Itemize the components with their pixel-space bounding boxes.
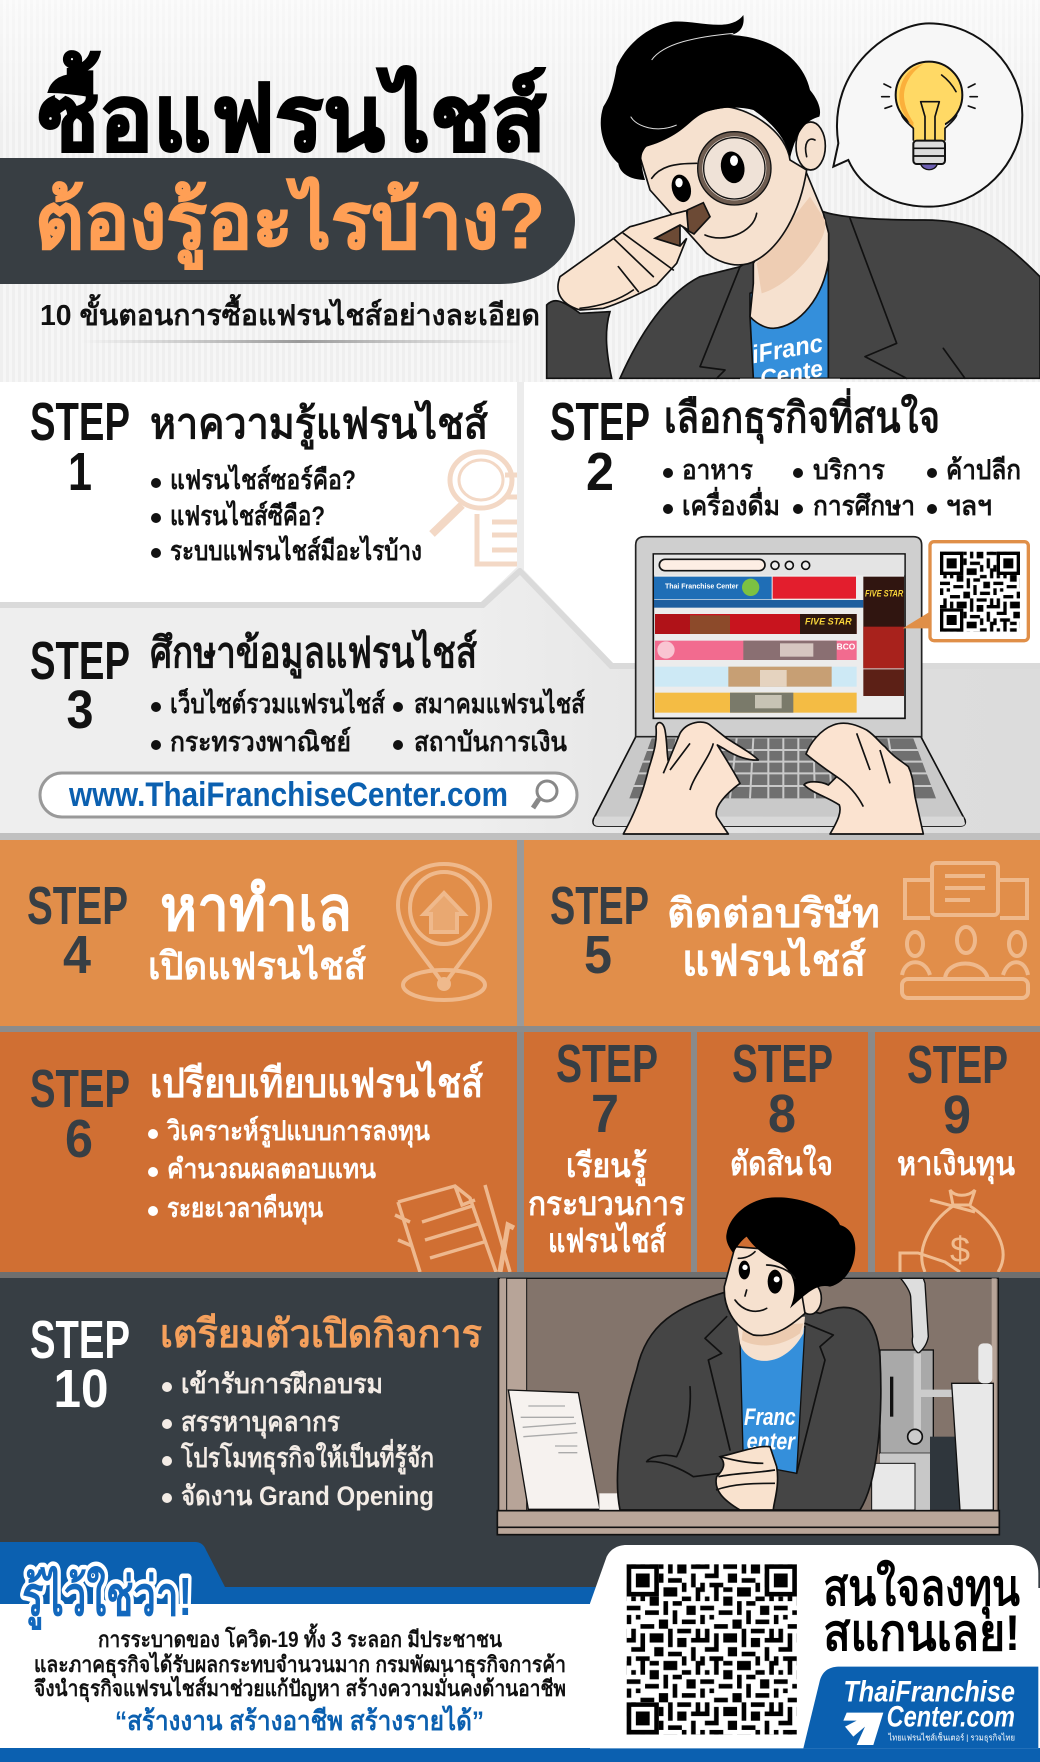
panel: step 3: [30, 628, 585, 817]
illustration: man at shop counter: enter: [747, 1428, 796, 1455]
title line 1: ซื้อแฟรนไชส์: [38, 51, 547, 170]
call to action text: สแกนเลย!: [823, 1605, 1020, 1661]
panel: step 5: [524, 840, 1040, 1026]
laptop screen: FIVE STAR: [805, 617, 852, 627]
illustration: man with magnifying glass: iFranc: [750, 329, 825, 369]
icon: location pin: [398, 864, 490, 1000]
step label: STEP: [556, 1034, 658, 1094]
title pill: ต้องรู้อะไรบ้าง?: [35, 176, 545, 270]
hand: [558, 211, 688, 310]
illustration: man at shop counter: [497, 1197, 999, 1535]
heading: เลือกธุรกิจที่สนใจ: [664, 388, 940, 444]
paragraph: การระบาดของ โควิด-19 ทั้ง 3 ระลอก มีประชาชน: [98, 1623, 502, 1652]
bullets: [663, 455, 1021, 521]
bullets: สรรหาบุคลากร: [181, 1407, 340, 1439]
step number: 10: [54, 1359, 108, 1419]
logo block: [803, 1667, 1038, 1748]
label text: [528, 1147, 685, 1259]
bullets: ระบบแฟรนไชส์มีอะไรบ้าง: [170, 535, 422, 566]
ear: [799, 1282, 821, 1314]
heading: ศึกษาข้อมูลแฟรนไชส์: [150, 628, 477, 679]
bullets: อาหาร: [682, 455, 753, 485]
step number: 9: [943, 1085, 971, 1145]
heading: เปรียบเทียบแฟรนไชส์: [150, 1060, 484, 1106]
bullets: กระทรวงพาณิชย์: [170, 726, 351, 757]
magnifier handle: [655, 203, 710, 246]
step label: STEP: [732, 1034, 833, 1094]
heading line 1: ติดต่อบริษัท: [667, 892, 880, 936]
step number: 4: [63, 925, 91, 985]
hair: [726, 1197, 855, 1308]
laptop screen: Thai Franchise Center: [665, 581, 738, 590]
label text: เรียนรู้: [566, 1147, 647, 1187]
step label: STEP: [550, 876, 649, 936]
hair: [601, 15, 820, 180]
bullets: เครื่องดื่ม: [682, 486, 780, 521]
label text: ตัดสินใจ: [730, 1144, 833, 1182]
hands: [623, 722, 923, 834]
bullets: วิเคราะห์รูปแบบการลงทุน: [166, 1115, 430, 1148]
step number: 2: [586, 442, 614, 502]
heading: หาความรู้แฟรนไชส์: [150, 399, 488, 450]
step label: STEP: [30, 1059, 130, 1119]
step label: STEP: [27, 876, 128, 936]
step label: STEP: [550, 392, 650, 452]
keyboard: [629, 738, 936, 798]
illustration: laptop with website and QR code: [593, 537, 1028, 834]
step number: 3: [66, 680, 94, 740]
bullets: แฟรนไชส์ซีคือ?: [170, 500, 325, 531]
bullets: ระยะเวลาคืนทุน: [167, 1193, 323, 1225]
step number: 1: [68, 442, 92, 502]
bullets: สถาบันการเงิน: [414, 727, 567, 757]
title pill: [0, 158, 575, 284]
subtitle: 10 ขั้นตอนการซื้อแฟรนไชส์อย่างละเอียด: [40, 293, 540, 332]
label text: แฟรนไชส์: [548, 1221, 667, 1259]
heading: รู้ไว้ใช่ว่า!: [22, 1565, 192, 1630]
bullets: ฯลฯ: [946, 491, 992, 521]
paragraph: และภาคธุรกิจได้รับผลกระทบจำนวนมาก กรมพัฒนาธุรกิจการค้า: [34, 1651, 566, 1679]
panel: step 7: [517, 1032, 1040, 1272]
bullets: [151, 686, 585, 757]
step label: STEP: [30, 392, 130, 452]
heading: เตรียมตัวเปิดกิจการ: [160, 1313, 482, 1356]
bullets: บริการ: [813, 455, 885, 485]
bullets: [151, 464, 422, 566]
coffee machine: [872, 1278, 993, 1510]
paragraph: [34, 1623, 566, 1703]
laptop screen: FIVE STAR: [865, 589, 904, 599]
icon: magnifier and document: [432, 452, 517, 564]
slogan: “สร้างงาน สร้างอาชีพ สร้างรายได้”: [115, 1705, 484, 1736]
heading: รู้ไว้ใช่ว่า!: [22, 1565, 192, 1630]
bullets: เข้ารับการฝึกอบรม: [181, 1369, 383, 1399]
icon: money bag: [900, 1190, 1003, 1272]
illustration: man at shop counter: Franc: [744, 1404, 796, 1431]
step number: 6: [65, 1109, 93, 1169]
website search box: www.ThaiFranchiseCenter.com: [68, 776, 508, 814]
step label: STEP: [30, 1310, 130, 1370]
bullets: [148, 1115, 430, 1225]
panel: step 4: [0, 840, 517, 1026]
step number: 7: [591, 1084, 619, 1144]
call to action text: [823, 1559, 1020, 1661]
title: [0, 51, 575, 332]
illustration: man with magnifying glass: [547, 15, 1040, 392]
header background: [0, 0, 1040, 382]
row bands: [0, 840, 1040, 1032]
icon: notes and pen: [395, 1185, 514, 1272]
heading line 2: แฟรนไชส์: [682, 936, 866, 984]
bullets: คำนวณผลตอบแทน: [167, 1154, 376, 1184]
paragraph: จึงนำธุรกิจแฟรนไชส์มาช่วยแก้ปัญหา สร้างความมั่นคงด้านอาชีพ: [34, 1672, 566, 1703]
step number: 8: [768, 1084, 796, 1144]
magnifier: [698, 132, 771, 205]
icon: meeting: [902, 863, 1028, 998]
bullets: สมาคมแฟรนไชส์: [414, 688, 585, 719]
panel: did you know: [0, 1542, 1040, 1762]
illustration: man with magnifying glass: Cente: [758, 355, 825, 392]
QR code: [627, 1564, 797, 1735]
step label: STEP: [30, 631, 130, 691]
panel: step 8: [697, 1032, 868, 1272]
laptop screen: BCO: [837, 641, 856, 651]
panel: step 6: [0, 1032, 517, 1272]
bullets: [162, 1369, 434, 1511]
counter: [497, 1511, 999, 1535]
bullets: จัดงาน Grand Opening: [181, 1481, 434, 1511]
panel: QR call to action: [590, 1545, 1038, 1748]
panel: step 10: [0, 1272, 1040, 1588]
step number: 5: [584, 925, 612, 985]
head: [724, 1247, 805, 1335]
clasped hands: [716, 1446, 778, 1510]
bullets: ค้าปลีก: [946, 455, 1021, 485]
paper sign: [508, 1390, 623, 1510]
laptop screen: [653, 554, 905, 718]
logo block: ไทยแฟรนไชส์เซ็นเตอร์ | รวมธุรกิจไทย: [887, 1732, 1015, 1744]
QR callout: [903, 542, 1028, 641]
subheading: เปิดแฟรนไชส์: [148, 944, 367, 988]
label text: หาเงินทุน: [897, 1145, 1015, 1185]
label text: กระบวนการ: [528, 1185, 685, 1222]
panel: step 9: [875, 1032, 1040, 1272]
bullets: แฟรนไชส์ซอร์คือ?: [170, 464, 356, 495]
panel: step 2: [550, 388, 1021, 521]
jacket: [617, 1292, 881, 1510]
bullets: การศึกษา: [813, 491, 915, 521]
bullets: เว็บไซต์รวมแฟรนไชส์: [170, 686, 385, 719]
heading: หาทำเล: [160, 875, 352, 944]
panel: step 1: [30, 392, 517, 566]
speech bubble with light bulb: [833, 23, 1022, 207]
panel background: steps 1-3: [0, 382, 1040, 840]
bullets: โปรโมทธุรกิจให้เป็นที่รู้จัก: [180, 1438, 434, 1475]
icon: money bag: $: [950, 1229, 970, 1270]
